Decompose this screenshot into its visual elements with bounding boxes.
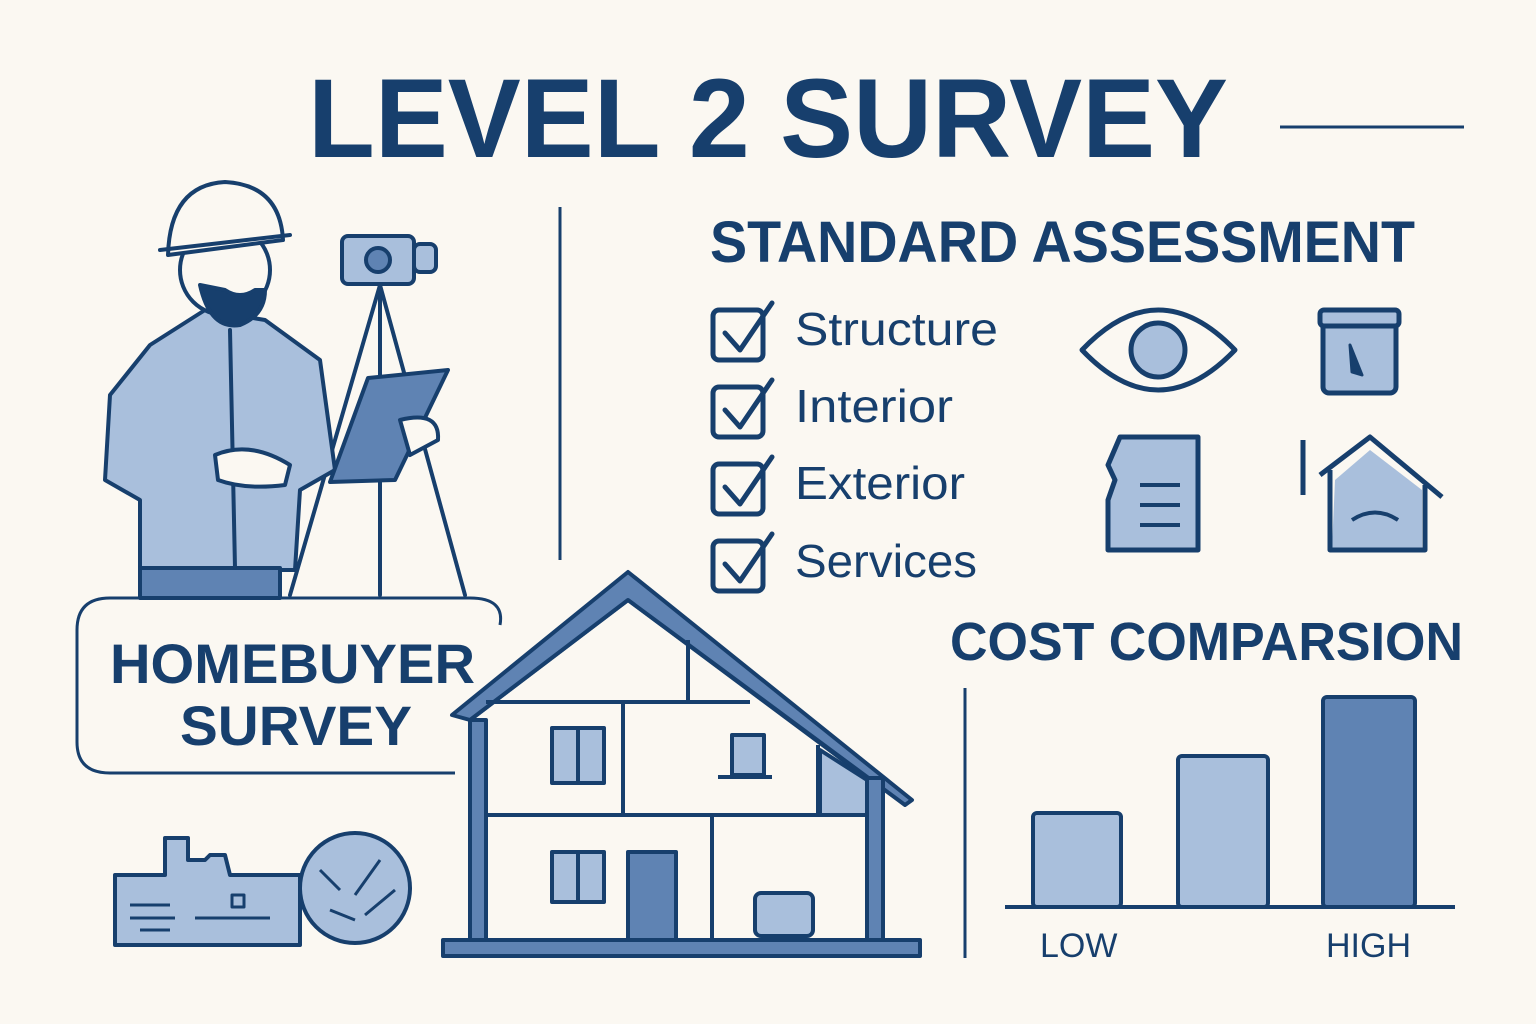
tablet — [330, 370, 448, 482]
title: LEVEL 2 SURVEY — [308, 56, 1228, 181]
homebuyer survey label box: HOMEBUYER — [110, 632, 475, 695]
checklist — [713, 303, 998, 591]
homebuyer survey label box — [77, 598, 501, 773]
homebuyer survey label box: SURVEY — [180, 694, 412, 757]
head — [180, 225, 270, 315]
icon: survey equipment — [115, 833, 410, 945]
bar chart — [965, 688, 1455, 965]
checklist: Exterior — [795, 457, 965, 509]
checklist: Services — [795, 535, 977, 587]
heading: standard assessment: STANDARD ASSESSMENT — [710, 210, 1415, 275]
checklist: Structure — [795, 303, 998, 355]
heading: cost comparison: COST COMPARSION — [950, 612, 1463, 672]
icons: eye, jar, document, damaged house — [1082, 310, 1442, 550]
illustration: house cross-section — [443, 572, 920, 956]
illustration: surveyor with tripod — [105, 182, 465, 598]
tripod — [290, 236, 465, 595]
bar chart: LOW — [1040, 927, 1117, 965]
body — [105, 310, 335, 570]
bar chart: HIGH — [1326, 927, 1411, 965]
checklist: Interior — [795, 380, 953, 432]
